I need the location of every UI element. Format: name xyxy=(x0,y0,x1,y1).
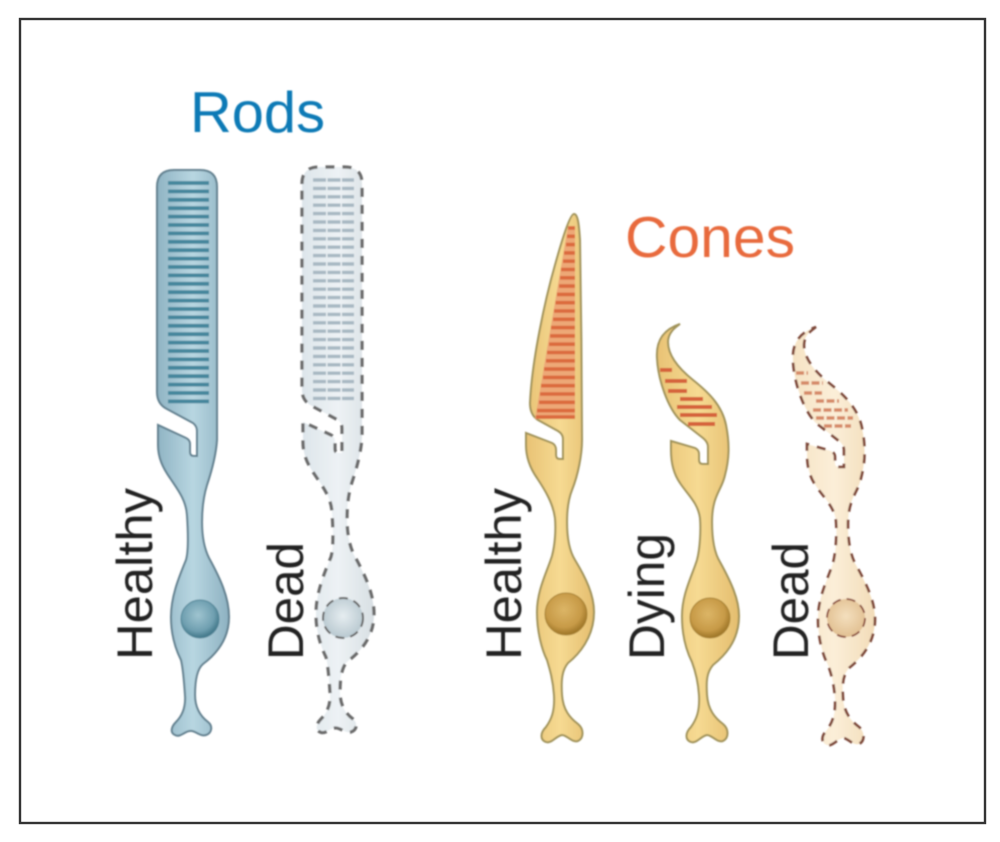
rod healthy cell body xyxy=(157,170,229,736)
cone dead nucleus xyxy=(827,599,865,637)
label: Dying cones: Dying xyxy=(619,533,675,660)
rod dead cell body xyxy=(302,167,374,733)
rod: dead xyxy=(302,167,374,733)
cone dead cell body xyxy=(793,327,875,745)
cone healthy stack backing xyxy=(535,226,575,419)
cone healthy nucleus xyxy=(545,593,587,635)
label: Healthy cones: Healthy xyxy=(476,488,532,660)
cone dying disc fragments xyxy=(660,370,717,424)
rod dead nucleus xyxy=(323,598,363,638)
cone dying cell body xyxy=(657,324,739,742)
cone dying nucleus xyxy=(690,598,730,638)
rod healthy disc stack xyxy=(168,183,209,401)
cone healthy cell body xyxy=(526,214,594,742)
cone healthy disc stack xyxy=(536,228,575,417)
title: Cones: Cones xyxy=(625,206,795,270)
cone: dying xyxy=(657,324,739,742)
rod: healthy xyxy=(157,170,229,736)
rod healthy nucleus xyxy=(181,600,219,638)
cone: healthy xyxy=(526,214,594,742)
rod dead disc stack xyxy=(313,180,354,398)
cone: dead xyxy=(793,327,875,745)
label: Dead rods: Dead xyxy=(258,542,314,660)
label: Dead cones: Dead xyxy=(763,542,819,660)
title: Rods: Rods xyxy=(190,81,325,145)
label: Healthy rods: Healthy xyxy=(107,488,163,660)
cone dead disc fragments xyxy=(796,373,853,426)
